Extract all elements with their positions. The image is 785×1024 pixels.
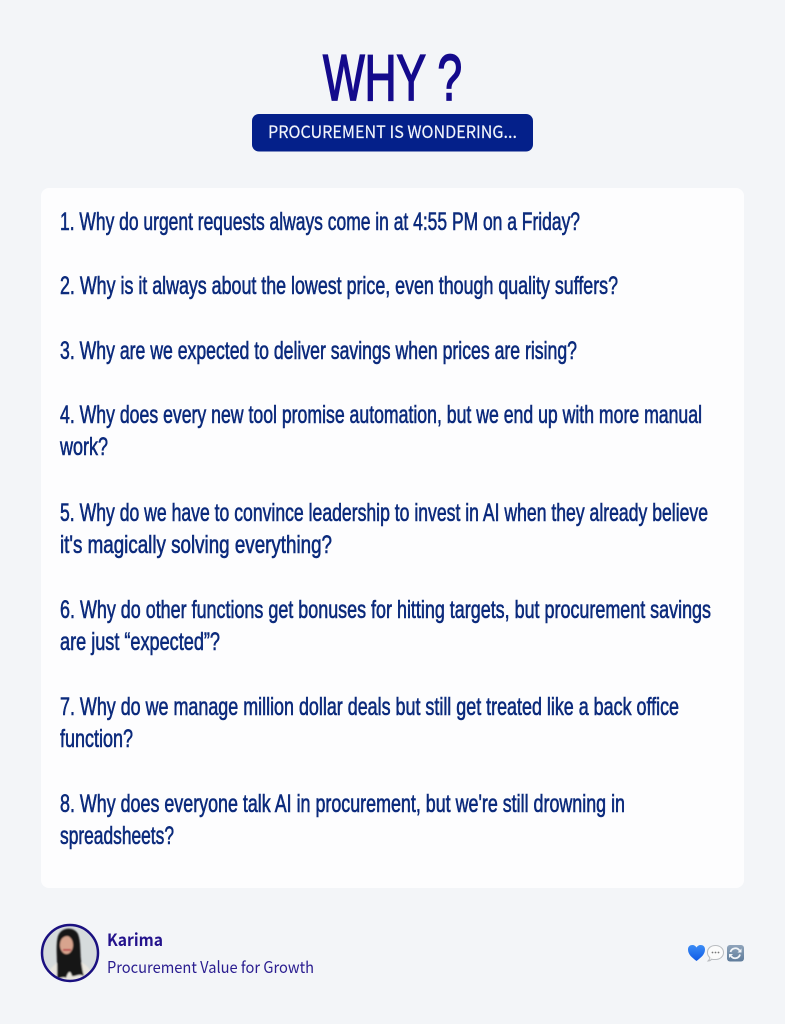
icon: refresh [727,945,744,962]
question 7: function? [60,725,133,753]
author tagline: Procurement Value for Growth [107,954,314,978]
subtitle pill: PROCUREMENT IS WONDERING... [268,118,517,143]
subtitle pill [252,114,533,152]
author name: Karima [107,926,163,951]
question 1: 1. Why do urgent requests always come in at 4:55 PM on a Friday? [60,208,580,236]
question 7 [60,693,679,753]
title: WHY ? [323,41,462,114]
question 4 [59,401,702,461]
icon: speech bubble [708,946,724,961]
icon: blue heart [688,945,705,961]
question 8: spreadsheets? [60,822,174,850]
question 3: 3. Why are we expected to deliver savings when prices are rising? [60,337,577,365]
question 6: are just “expected”? [60,628,220,656]
panel: questions [41,188,744,888]
question 5: it's magically solving everything? [60,531,332,559]
author avatar [42,925,98,985]
question 6 [60,596,711,656]
question 8 [60,790,625,850]
question 4: work? [59,433,108,461]
question 5 [60,499,708,559]
